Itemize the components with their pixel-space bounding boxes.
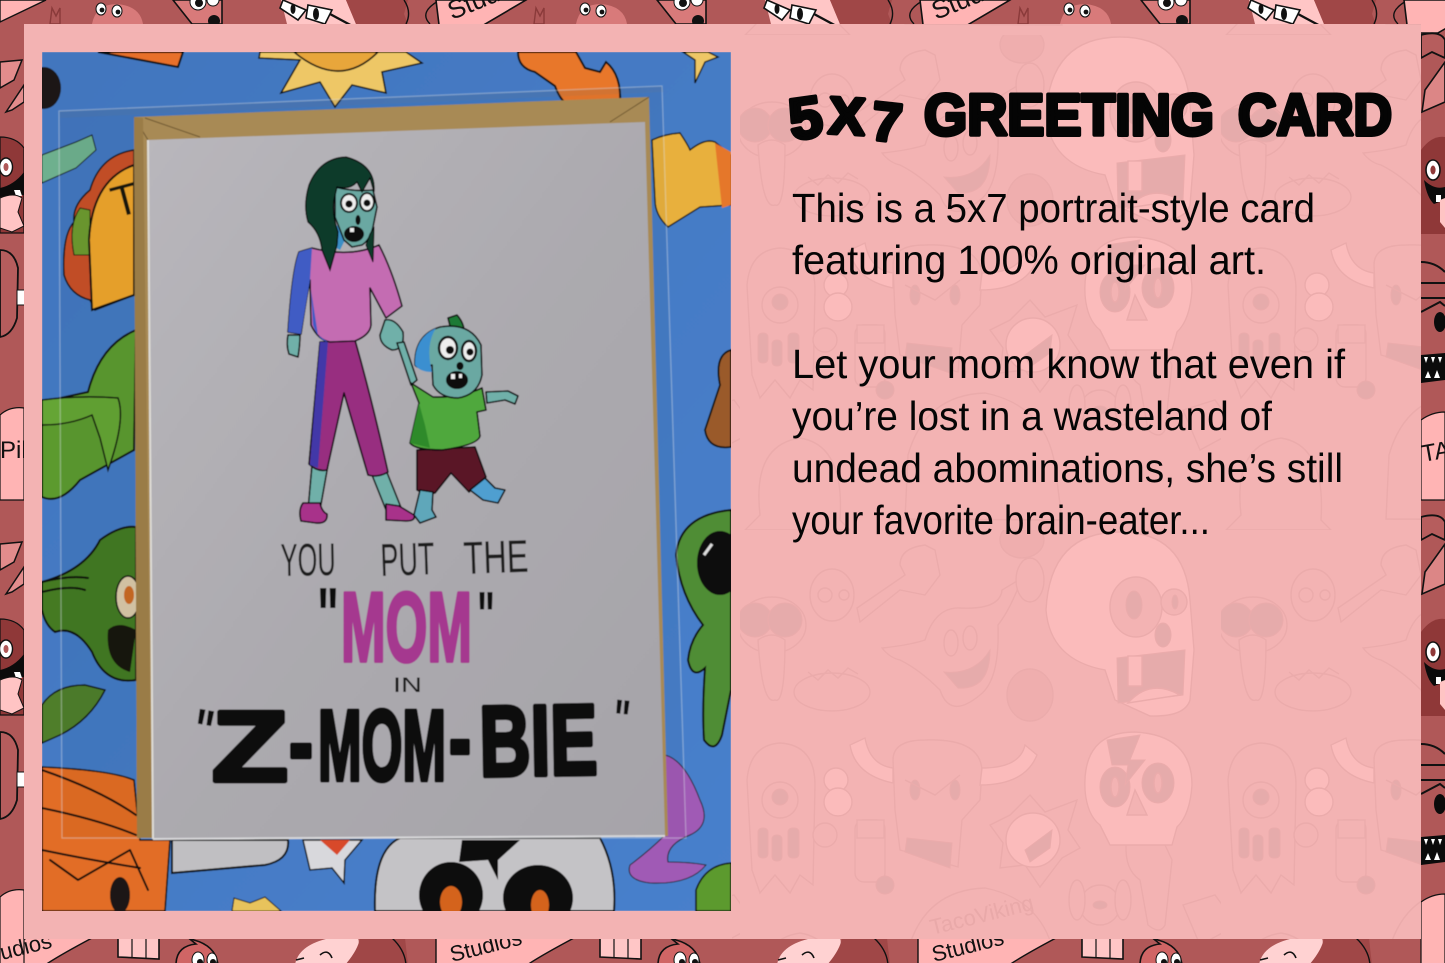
card word: MOM <box>320 588 493 664</box>
bottom band characters <box>0 936 1372 963</box>
border sign text: left side: Pik <box>0 437 34 464</box>
heading <box>785 83 1392 154</box>
card phrase: Z-MOM-BIE: - <box>449 683 471 795</box>
message text: you’re lost in a wasteland of <box>792 393 1273 439</box>
wrapping paper: top shapes <box>27 52 718 109</box>
message text: Let your mom know that even if <box>792 341 1346 387</box>
card line: you put the: YOU <box>280 533 336 586</box>
heading: 7 <box>869 91 905 154</box>
intro text: This is a 5x7 portrait-style card <box>792 185 1315 231</box>
intro text <box>792 185 1315 283</box>
card phrase: Z-MOM-BIE: MOM <box>318 690 446 802</box>
wrapping paper: left column characters <box>42 135 170 913</box>
wrapping paper: right column characters <box>629 133 743 911</box>
kraft envelope <box>134 97 668 838</box>
illustration: zombie mother <box>287 157 414 523</box>
card line: you put the: PUT <box>380 532 435 586</box>
heading: GREETING <box>924 83 1214 148</box>
card phrase: Z-MOM-BIE: BIE <box>478 684 598 798</box>
heading: 5 <box>785 84 826 153</box>
card phrase: Z-MOM-BIE: Z <box>212 691 288 803</box>
wrapping paper: bottom characters <box>170 836 616 911</box>
card word: MOM: MOM <box>341 572 472 682</box>
product photo <box>27 52 743 931</box>
card word: MOM: " <box>477 577 495 655</box>
heading: X <box>827 87 867 147</box>
watermark brand text: TacoViking <box>927 890 1036 940</box>
message text: your favorite brain-eater... <box>792 497 1210 543</box>
card phrase: Z-MOM-BIE: " <box>188 696 219 765</box>
taco lettering: T <box>106 173 145 228</box>
message text: undead abominations, she’s still <box>792 445 1343 491</box>
top band characters <box>0 0 1445 33</box>
right edge characters <box>1421 33 1445 963</box>
heading: CARD <box>1238 83 1392 148</box>
card word: in: IN <box>393 674 422 697</box>
card phrase: Z-MOM-BIE: - <box>289 687 313 799</box>
card word: MOM: " <box>317 571 339 660</box>
illustration: zombie child <box>397 315 518 523</box>
plastic sleeve <box>59 86 686 838</box>
card phrase: Z-MOM-BIE: " <box>610 687 633 751</box>
wrapping paper: sun <box>259 52 422 107</box>
card line: you put the <box>280 540 528 576</box>
greeting card <box>148 122 665 839</box>
message text <box>792 341 1346 543</box>
card phrase: Z-MOM-BIE <box>197 699 630 784</box>
intro text: featuring 100% original art. <box>792 237 1266 283</box>
left edge characters <box>0 60 25 963</box>
card line: you put the: THE <box>463 530 529 584</box>
